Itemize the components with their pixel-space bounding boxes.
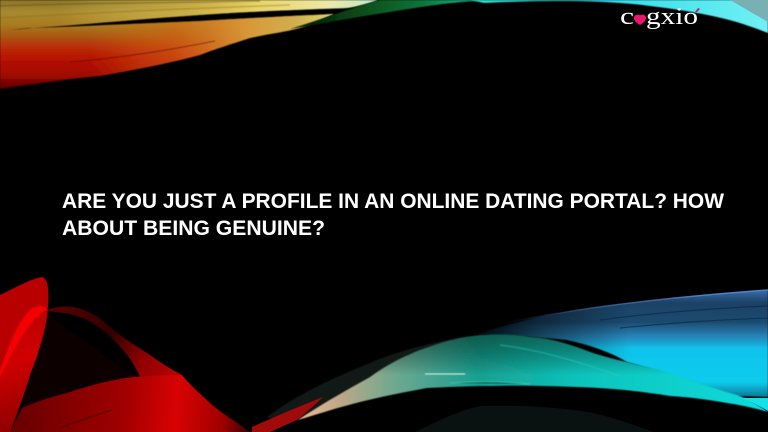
bottom left red ribbons	[0, 277, 250, 432]
bottom teal swoosh	[298, 335, 768, 420]
logo accent	[695, 8, 700, 12]
logo: cogxio	[620, 4, 700, 30]
bottom cyan tip	[740, 398, 768, 411]
bottom red tip	[252, 397, 323, 432]
top cyan swoosh	[470, 0, 768, 33]
heading	[62, 189, 725, 240]
heading: ARE YOU JUST A PROFILE IN AN ONLINE DATING PORTAL? HOW	[62, 189, 725, 213]
logo: cogxio: gxio	[646, 4, 698, 30]
bottom blue swoosh	[470, 288, 768, 397]
top right grey streak	[730, 0, 768, 22]
top left swoosh	[0, 0, 378, 89]
logo: cogxio: c	[620, 4, 634, 30]
bottom grey shadow shapes	[415, 406, 653, 432]
heading: ABOUT BEING GENUINE?	[62, 216, 325, 240]
top green swoosh	[290, 0, 490, 29]
bottom dark sliver	[267, 338, 460, 420]
logo heart	[634, 15, 646, 25]
